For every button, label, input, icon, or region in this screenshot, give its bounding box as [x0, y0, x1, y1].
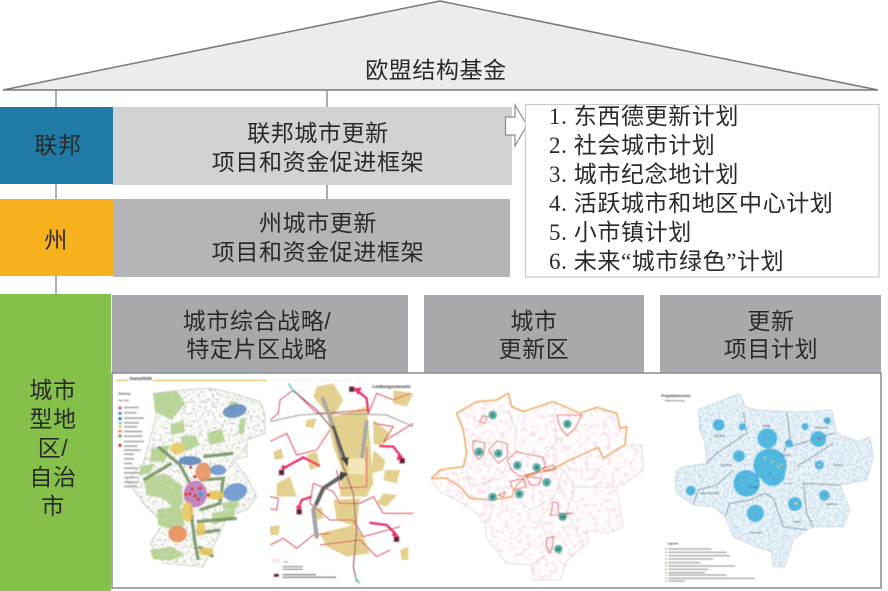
federal framework bar: 联邦城市更新 [247, 120, 389, 146]
map: urban renewal areas: 7 [545, 480, 548, 486]
municipal level panel [0, 294, 111, 591]
map: Gera 2030 concept: Eignung [118, 392, 130, 396]
municipal level panel: 自治 [29, 464, 77, 490]
map: urban renewal areas: 3 [478, 449, 481, 455]
map: Gera 2030 concept [116, 376, 270, 570]
map: Gera 2030 concept: Plan 2030 [118, 401, 130, 403]
map: project overview: Eving [763, 423, 770, 427]
map: project overview: Projektübersicht [661, 394, 691, 398]
programme list box: 1. 东西德更新计划 [549, 104, 739, 129]
map: steering scenario [270, 377, 413, 583]
map: project overview [661, 390, 877, 582]
map: urban renewal areas: 6 [535, 465, 538, 471]
map: project overview: Stadterneuerung [665, 398, 685, 402]
map: project overview: Hombruch [751, 530, 763, 534]
map: urban renewal areas: 11 [556, 547, 561, 553]
state framework bar: 项目和资金促进框架 [212, 239, 424, 265]
map: urban renewal areas: 4 [497, 451, 500, 457]
programme list box: 5. 小市镇计划 [549, 220, 692, 245]
state framework bar [113, 199, 510, 277]
federal framework bar [113, 107, 512, 185]
arrow to programme list [506, 105, 527, 146]
municipal level panel: 城市 [29, 377, 77, 403]
map: Gera 2030 concept: Gera2030 [129, 376, 152, 382]
map: project overview: Lütgendortmund [699, 491, 719, 495]
map: urban renewal areas: 1 [491, 413, 494, 419]
map: project overview: Legende [667, 542, 679, 546]
map: project overview: Mengede [714, 434, 726, 438]
state framework bar: 州城市更新 [259, 210, 377, 236]
programme list box: 4. 活跃城市和地区中心计划 [549, 191, 833, 216]
row: federal level [0, 107, 512, 185]
map: project overview: Hörde [793, 520, 801, 524]
row: state level [0, 199, 510, 277]
programme list box: 6. 未来“城市绿色”计划 [549, 249, 784, 274]
roof label: 欧盟结构基金 [365, 57, 507, 83]
programme list box: 3. 城市纪念地计划 [549, 162, 739, 187]
map: urban renewal areas: 2 [566, 422, 569, 428]
map: project overview: Brackel [834, 463, 843, 467]
header: project plan: 更新 [747, 308, 795, 334]
header: project plan: 项目计划 [724, 336, 818, 362]
header: renewal area: 更新区 [499, 336, 569, 362]
map frame [112, 373, 881, 588]
roof: 欧盟结构基金 [3, 1, 878, 90]
header: integrated strategy: 特定片区战略 [186, 336, 328, 362]
map: urban renewal areas: 10 [560, 514, 566, 520]
map: project overview: In.-West [749, 485, 759, 489]
map: project overview: Huckarde [721, 463, 733, 467]
programme list box: 2. 社会城市计划 [549, 133, 715, 158]
header: integrated strategy [112, 295, 408, 373]
map: project overview: In.-Ost [783, 481, 792, 485]
state label: 州 [44, 227, 68, 253]
header: renewal area: 城市 [510, 308, 558, 334]
map: urban renewal areas: 9 [518, 492, 521, 498]
map: project overview: St.-Nord [781, 453, 791, 457]
municipal level panel: 型地 [29, 406, 77, 432]
map: steering scenario: Stadt [283, 560, 288, 563]
map: urban renewal areas: 5 [516, 463, 519, 469]
connector lines [56, 90, 327, 294]
map: project overview: Scharnhorst [814, 426, 829, 430]
map: steering scenario: ENTWICKLUNGSKONZEPTION WOHNEN 2030 · GERA [273, 377, 366, 381]
map: steering scenario: Lenkungsszenario [373, 384, 411, 389]
federal framework bar: 项目和资金促进框架 [212, 149, 424, 175]
map: urban renewal areas [430, 390, 647, 583]
programme list box [526, 104, 879, 277]
federal label: 联邦 [34, 132, 82, 158]
map: project overview: Aplerbeck [826, 502, 838, 506]
header: project plan [660, 295, 881, 373]
header: integrated strategy: 城市综合战略/ [183, 308, 331, 334]
municipal level panel: 市 [41, 493, 65, 519]
map: urban renewal areas: 8 [491, 495, 494, 501]
header: renewal area [424, 295, 644, 373]
municipal level panel: 区/ [38, 435, 68, 461]
